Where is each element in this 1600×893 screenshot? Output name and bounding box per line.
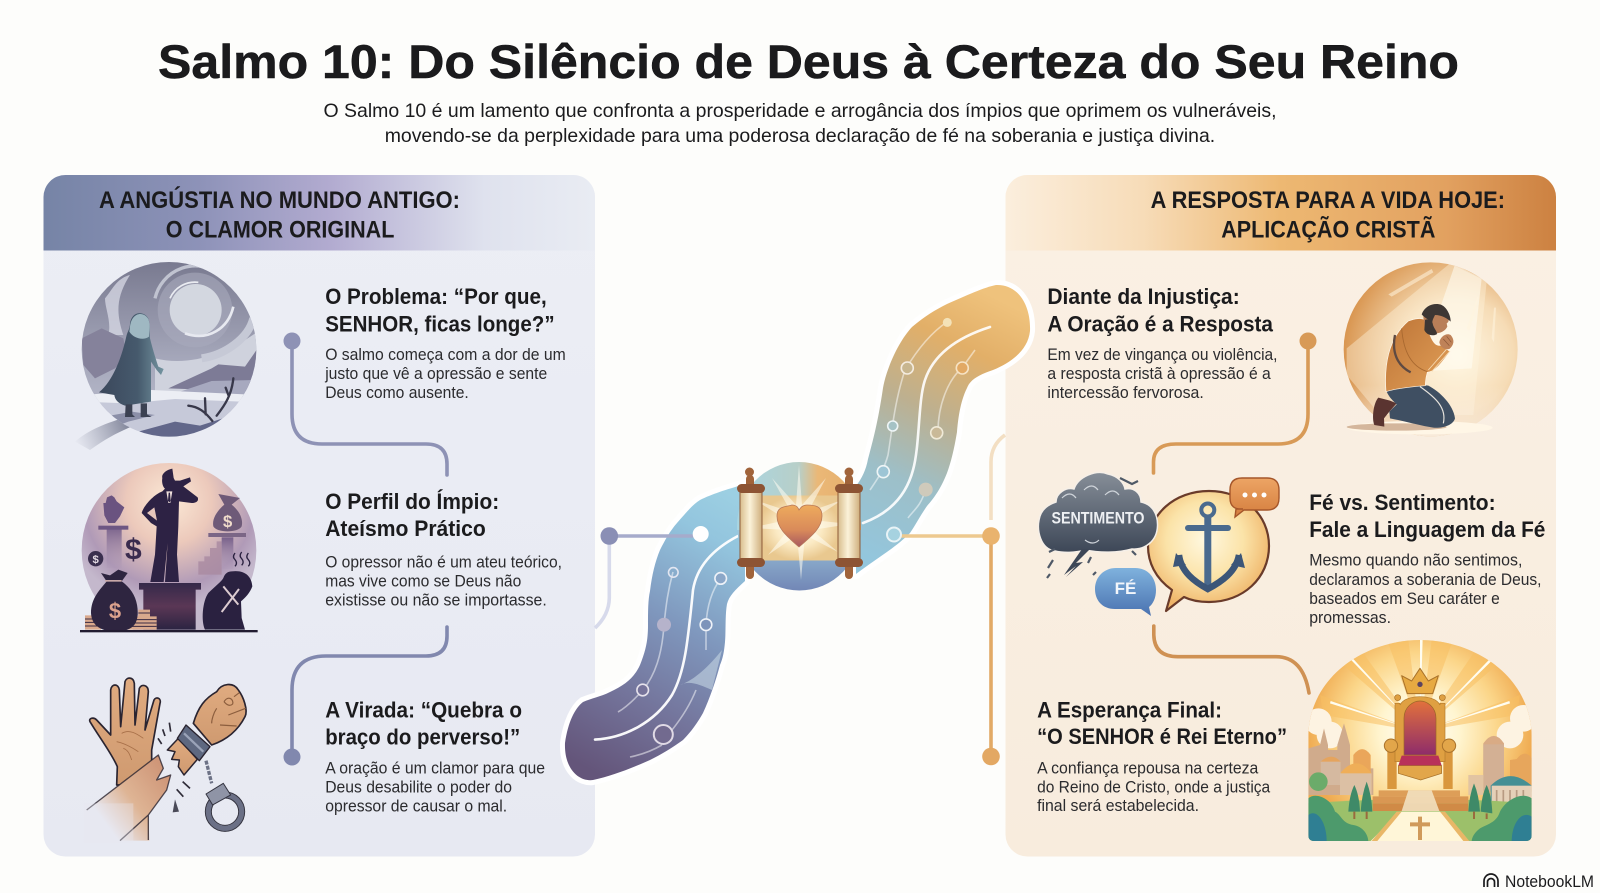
bushes bbox=[1308, 796, 1368, 842]
item: a virada: braço do perverso!” bbox=[325, 724, 520, 749]
item: o problema: justo que vê a opressão e sente bbox=[324, 365, 547, 383]
item: a esperança final: do Reino de Cristo, onde a justiça bbox=[1037, 778, 1271, 796]
cypress trees bbox=[1348, 782, 1492, 813]
item: a virada: Deus desabilite o poder do bbox=[325, 779, 512, 797]
subtitle: O Salmo 10 é um lamento que confronta a prosperidade e arrogância dos ímpios que oprimem os vulneráveis, bbox=[324, 100, 1276, 122]
item: a esperança final: final será estabelecida. bbox=[1037, 797, 1199, 815]
cross bbox=[1410, 817, 1430, 840]
cloud bbox=[1038, 472, 1158, 578]
sparks bbox=[158, 723, 190, 797]
item: o problema: O Problema: “Por que, bbox=[325, 284, 547, 309]
item: fé vs sentimento: promessas. bbox=[1309, 609, 1391, 627]
panel header: A RESPOSTA PARA A VIDA HOJE: bbox=[1151, 187, 1505, 214]
item: o problema: O salmo começa com a dor de um bbox=[325, 346, 566, 364]
steps bbox=[1379, 790, 1460, 796]
ground shadow bbox=[1347, 421, 1493, 434]
panel: a resposta para a vida hoje bbox=[1006, 175, 1556, 856]
ground bbox=[1307, 799, 1533, 843]
item: diante da injustiça: Diante da Injustiça: bbox=[1047, 284, 1240, 309]
torso bbox=[1386, 319, 1450, 392]
item: o problema bbox=[324, 284, 566, 402]
ground line bbox=[80, 630, 258, 632]
icon: cloaked figure under a storm bbox=[75, 260, 260, 450]
rays bbox=[750, 465, 850, 580]
icon: arrogant oppressor on a pedestal bbox=[80, 461, 258, 632]
subtitle bbox=[324, 100, 1276, 147]
oppressor silhouette bbox=[142, 469, 198, 582]
panel background bbox=[44, 175, 595, 856]
clouds bbox=[1308, 708, 1332, 735]
money bag left: $ bbox=[109, 599, 121, 624]
fist bbox=[193, 685, 246, 745]
money bag left bbox=[91, 570, 138, 631]
item: diante da injustiça bbox=[1047, 284, 1278, 402]
scroll with heart bbox=[737, 465, 863, 580]
item: o perfil do ímpio: O opressor não é um ateu teórico, bbox=[325, 554, 562, 572]
item: fé vs sentimento: Fale a Linguagem da Fé bbox=[1309, 517, 1545, 542]
praying hands bbox=[1439, 334, 1453, 349]
upper right money bag: $ bbox=[223, 512, 233, 531]
crushed person bbox=[203, 571, 252, 630]
icon: sentimento cloud with anchor of faith bbox=[1038, 472, 1279, 616]
orange dots bubble bbox=[1230, 478, 1279, 517]
item: o perfil do ímpio: Ateísmo Prático bbox=[325, 516, 486, 541]
item: o perfil do ímpio bbox=[325, 489, 562, 610]
item: fé vs sentimento: Mesmo quando não sentimos, bbox=[1309, 552, 1522, 570]
heart bbox=[777, 505, 822, 547]
item: a esperança final: “O SENHOR é Rei Eterno” bbox=[1037, 724, 1287, 749]
dollar and coin: $ bbox=[125, 534, 142, 567]
fé bubble bbox=[1095, 568, 1156, 616]
item: fé vs sentimento bbox=[1309, 490, 1545, 627]
raised hand on pillar bbox=[103, 495, 124, 523]
item: a esperança final: A confiança repousa na certeza bbox=[1037, 759, 1259, 777]
panel background bbox=[1006, 175, 1556, 856]
icon: man kneeling in prayer bbox=[1340, 260, 1520, 442]
broken forearm piece bbox=[167, 738, 197, 775]
item: a virada: opressor de causar o mal. bbox=[325, 798, 507, 816]
broken lower arm bbox=[87, 755, 171, 841]
item: diante da injustiça: A Oração é a Resposta bbox=[1047, 312, 1273, 337]
throne bbox=[1384, 695, 1456, 789]
connector: perfil to virada bbox=[284, 627, 447, 766]
anchor speech bubble bbox=[1148, 491, 1269, 611]
subtitle: movendo-se da perplexidade para uma poderosa declaração de fé na soberania e justiça divina. bbox=[385, 125, 1215, 147]
item: o perfil do ímpio: mas vive como se Deus não bbox=[325, 573, 521, 591]
ribbon: upper right, christian life bbox=[856, 285, 1030, 574]
item: a esperança final bbox=[1037, 697, 1287, 815]
item: fé vs sentimento: baseados em Seu caráter e bbox=[1309, 590, 1500, 608]
panel header bbox=[1006, 175, 1556, 250]
parchment bbox=[758, 496, 840, 560]
right roller bbox=[835, 468, 863, 579]
central ribbon bbox=[565, 285, 1030, 780]
item: fé vs sentimento: declaramos a soberania de Deus, bbox=[1309, 571, 1542, 589]
connector: fé to esperança bbox=[1154, 626, 1309, 693]
center hub bbox=[737, 462, 861, 590]
item: fé vs sentimento: Fé vs. Sentimento: bbox=[1309, 490, 1496, 515]
item: a virada bbox=[325, 698, 545, 816]
left roller bbox=[737, 468, 765, 579]
connector: injustiça to fé bbox=[1154, 332, 1316, 473]
cloud: SENTIMENTO bbox=[1052, 510, 1145, 528]
panel header bbox=[44, 175, 595, 250]
item: a esperança final: A Esperança Final: bbox=[1037, 697, 1222, 722]
panel: a angústia no mundo antigo bbox=[44, 175, 595, 856]
item: o perfil do ímpio: existisse ou não se importasse. bbox=[325, 592, 547, 610]
upper right money bag bbox=[208, 494, 246, 537]
rays bbox=[1329, 640, 1511, 728]
icon: notebooklm logo bbox=[1484, 874, 1498, 887]
distress marks bbox=[233, 552, 250, 566]
trousers and foot bbox=[1373, 398, 1397, 427]
connector: scroll to right panel bbox=[887, 435, 1005, 765]
coins bbox=[85, 610, 157, 630]
icon: raised hand and broken arm in handcuffs bbox=[83, 678, 246, 843]
panel header: A ANGÚSTIA NO MUNDO ANTIGO: bbox=[99, 186, 460, 214]
item: a virada: A oração é um clamor para que bbox=[325, 759, 545, 777]
item: o problema: Deus como ausente. bbox=[325, 384, 469, 402]
item: a virada: A Virada: “Quebra o bbox=[325, 698, 522, 723]
item: o problema: SENHOR, ficas longe?” bbox=[325, 312, 555, 337]
ribbon: lower left, ancient world bbox=[565, 484, 745, 780]
item: diante da injustiça: intercessão fervorosa. bbox=[1047, 384, 1204, 402]
item: o perfil do ímpio: O Perfil do Ímpio: bbox=[325, 489, 499, 514]
background bar chart bbox=[198, 541, 222, 575]
head bbox=[1423, 306, 1449, 334]
connector: problema to perfil bbox=[284, 332, 447, 475]
icon: throne of the eternal king bbox=[1305, 638, 1537, 843]
notebooklm badge: NotebookLM bbox=[1505, 873, 1594, 891]
chain and handcuff ring bbox=[205, 761, 245, 831]
crown bbox=[1402, 668, 1438, 694]
connector: scroll to left panel bbox=[595, 526, 709, 628]
icon: arrogant oppressor on a pedestal: $ bbox=[93, 554, 100, 566]
pedestal bbox=[139, 583, 201, 630]
open hand bbox=[90, 678, 160, 785]
panel header: O CLAMOR ORIGINAL bbox=[166, 216, 394, 243]
title: Salmo 10: Do Silêncio de Deus à Certeza do Seu Reino bbox=[158, 35, 1459, 88]
city bbox=[1308, 723, 1373, 795]
cuff on wrist bbox=[177, 725, 210, 761]
panel header: APLICAÇÃO CRISTÃ bbox=[1221, 215, 1435, 243]
fé bubble: FÉ bbox=[1115, 579, 1136, 598]
item: diante da injustiça: a resposta cristã à opressão é a bbox=[1047, 365, 1272, 383]
item: diante da injustiça: Em vez de vingança ou violência, bbox=[1047, 346, 1278, 364]
